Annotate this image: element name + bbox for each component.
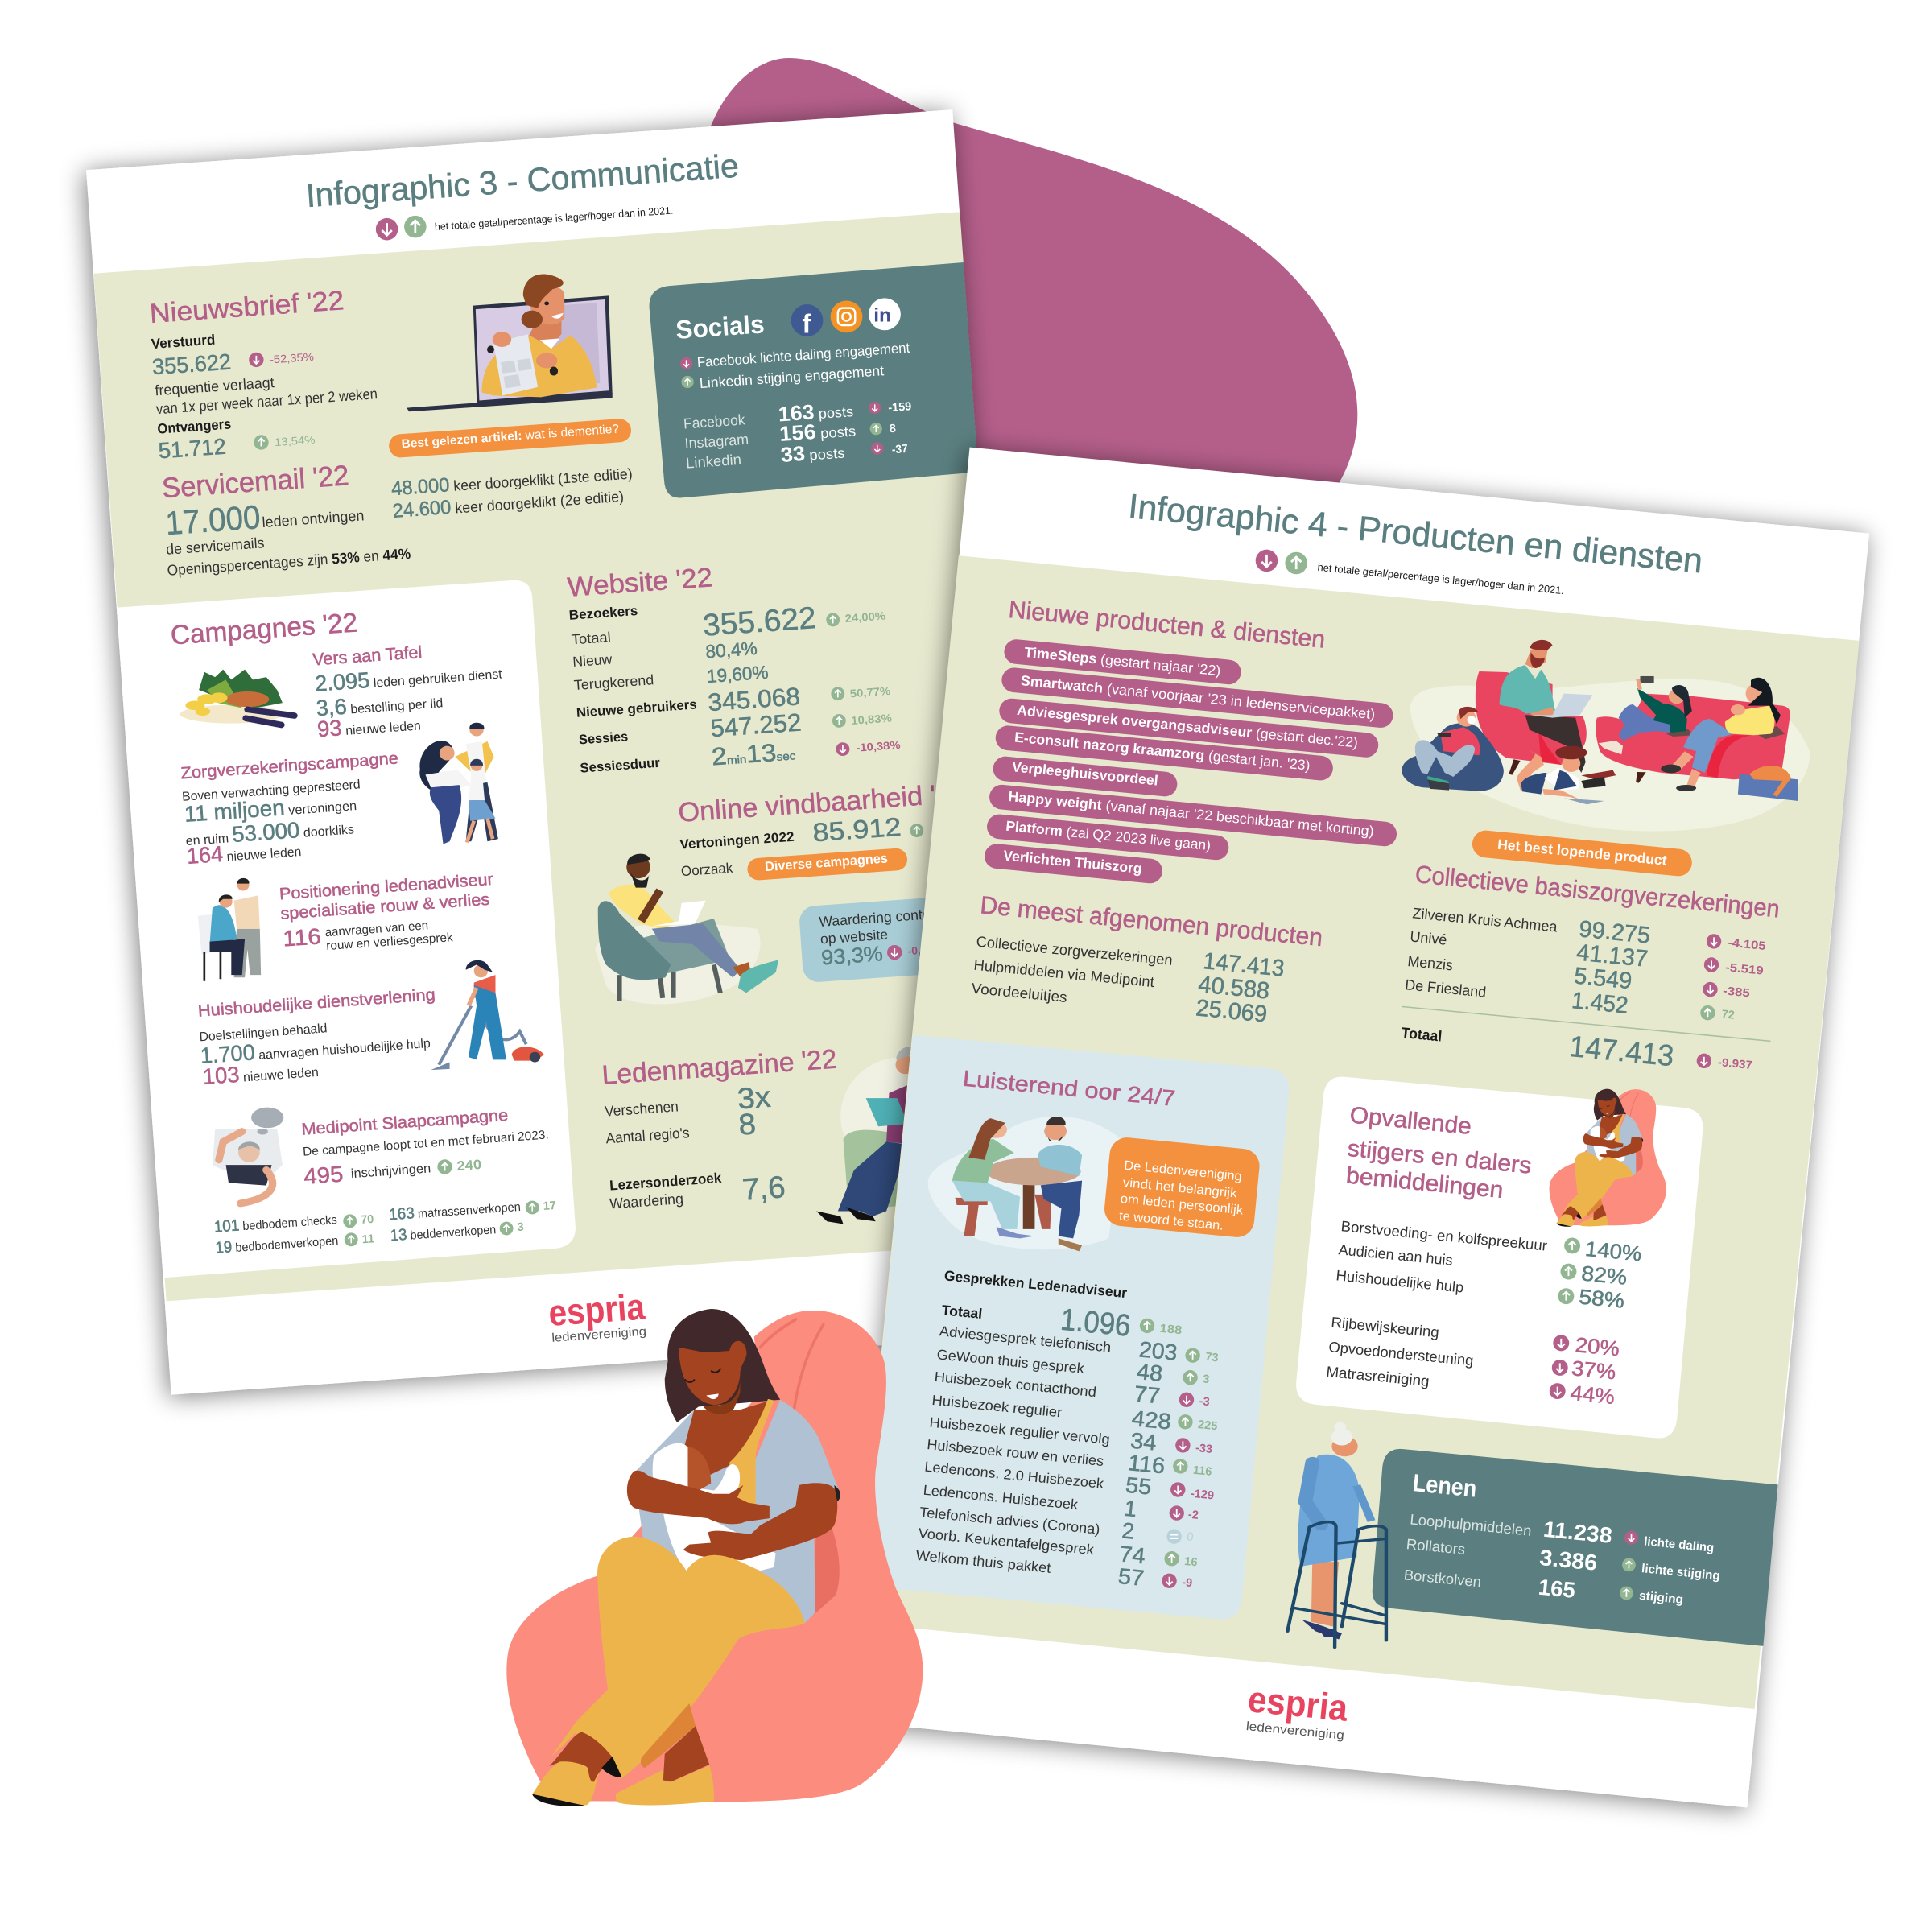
row huishoudelijke hulp: 58%	[1578, 1284, 1625, 1313]
text frequentie: frequentie verlaagt	[155, 374, 275, 398]
change -52,35%: -52,35%	[269, 351, 314, 366]
section: online vindbaarheid	[677, 778, 988, 983]
number verstuurd: 355.622	[151, 349, 232, 379]
row loophulpmiddelen	[1410, 1510, 1715, 1555]
row rollators: lichte stijging	[1641, 1562, 1721, 1583]
row huisbezoek regulier: 428	[1131, 1406, 1172, 1435]
row loophulpmiddelen: 11.238	[1542, 1517, 1613, 1548]
row waardering	[609, 1170, 786, 1212]
section: campagnes	[170, 608, 556, 1257]
row zilveren kruis	[1412, 904, 1766, 953]
row audicien: Audicien aan huis	[1338, 1241, 1454, 1269]
section: nieuwsbrief	[149, 286, 378, 463]
row rouw en verlies	[927, 1436, 1212, 1479]
pill happy weight: Happy weight (vanaf najaar '22 beschikbaar met korting)	[1008, 788, 1375, 840]
row adviesgesprek telefonisch: 73	[1205, 1351, 1219, 1364]
row rollators: 3.386	[1538, 1545, 1599, 1575]
callout: best gelezen artikel	[388, 418, 632, 458]
text boven verwachting: Boven verwachting gepresteerd	[182, 777, 361, 804]
panel: lenen	[1373, 1449, 1778, 1646]
heading online vindbaarheid: Online vindbaarheid '22	[677, 778, 967, 828]
heading luisterend: Luisterend oor 24/7	[962, 1066, 1176, 1111]
label verstuurd: Verstuurd	[151, 332, 216, 352]
stat 355.622: 24,00%	[844, 609, 886, 625]
stat 101: 101 bedbodem checks	[213, 1210, 338, 1236]
row gewoon thuis	[936, 1346, 1210, 1386]
pill verpleeghuisvoordeel	[992, 755, 1179, 798]
stat 355.622: 355.622	[702, 601, 817, 643]
row ledencons huisbezoek	[923, 1482, 1199, 1522]
stat 163: 17	[543, 1199, 556, 1213]
row totaal	[1401, 1024, 1752, 1072]
row hulpmiddelen: Hulpmiddelen via Medipoint	[973, 956, 1155, 990]
change 13,54%	[254, 434, 316, 450]
heading ledenmagazine: Ledenmagazine '22	[601, 1045, 838, 1091]
pill smartwatch: Smartwatch (vanaf voorjaar '23 in ledenservicepakket)	[1020, 672, 1376, 722]
illustration: elderly woman with walker	[1287, 1422, 1386, 1647]
row rouw en verlies: 116	[1192, 1464, 1212, 1479]
row huishoudelijke hulp	[1335, 1266, 1625, 1313]
stat 164: 164 nieuwe leden	[186, 836, 302, 869]
heading nieuwe producten: Nieuwe producten & diensten	[1007, 596, 1327, 654]
section: collectieve basiszorgverzekeringen	[1401, 861, 1781, 1072]
row zorgverzekeringen	[976, 933, 1286, 982]
clicks 48.000: 48.000 keer doorgeklikt (1ste editie)	[390, 461, 633, 500]
row waardering: Waardering	[609, 1190, 684, 1212]
row voordeeluitjes	[971, 980, 1268, 1028]
text de servicemails: de servicemails	[165, 534, 265, 558]
change 13,54%: 13,54%	[274, 434, 316, 448]
row telefonisch advies: 0	[1187, 1530, 1194, 1544]
pill timesteps: TimeSteps (gestart najaar '22)	[1024, 644, 1221, 679]
row totaal: -9.937	[1717, 1056, 1752, 1072]
row borstkolven: Borstkolven	[1403, 1566, 1482, 1590]
heading opvallende: bemiddelingen	[1345, 1163, 1505, 1203]
change -52,35%	[249, 351, 314, 367]
pill platform: Platform (zal Q2 2023 live gaan)	[1005, 818, 1212, 853]
section: ledenmagazine	[601, 1045, 838, 1212]
row welkom thuis: Welkom thuis pakket	[915, 1547, 1051, 1576]
row rijbewijskeuring: 20%	[1575, 1332, 1620, 1360]
row instagram	[684, 416, 896, 452]
row facebook: 163 posts	[778, 397, 854, 426]
row opvoedondersteuning	[1328, 1338, 1617, 1384]
row zilveren kruis: 99.275	[1578, 916, 1651, 949]
pill e-consult: E-consult nazorg kraamzorg (gestart jan. '23)	[1013, 729, 1311, 774]
row voordeeluitjes: Voordeeluitjes	[971, 980, 1068, 1005]
row regio's: 8	[737, 1107, 757, 1141]
callout: ledenvereniging quote: vindt het belangrijk	[1122, 1175, 1238, 1201]
row linkedin: 33 posts	[780, 438, 845, 467]
heading meest afgenomen: De meest afgenomen producten	[979, 891, 1323, 952]
row instagram: 156 posts	[778, 416, 857, 446]
page: infographic 4 producten en diensten	[848, 448, 1869, 1807]
labels website: Totaal	[571, 629, 611, 648]
box waardering content: op website	[819, 927, 889, 947]
row zorgverzekeringen: 147.413	[1202, 948, 1286, 982]
icon: linkedin: in	[873, 304, 891, 326]
pill diverse campagnes	[747, 848, 908, 881]
pill timesteps	[1003, 638, 1242, 686]
illustration: mother breastfeeding on beanbag	[506, 1309, 923, 1806]
pill platform	[986, 813, 1230, 861]
row waardering: 7,6	[741, 1170, 786, 1208]
heading zorgverzekeringscampagne: Zorgverzekeringscampagne	[180, 749, 399, 782]
note facebook engagement: Facebook lichte daling engagement	[696, 340, 910, 370]
stat 547.252: 10,83%	[851, 712, 892, 727]
row verschenen: Verschenen	[604, 1097, 679, 1120]
row huisbezoek regulier	[931, 1392, 1218, 1435]
clicks 24.600: 24.600 keer doorgeklikt (2e editie)	[392, 485, 625, 522]
heading opvallende	[1345, 1103, 1533, 1203]
row keukentafelgesprek: 74	[1118, 1541, 1146, 1568]
purple background blob	[711, 58, 1357, 518]
logo: espria page 3: espria	[547, 1286, 646, 1334]
row totaal: 1.096	[1059, 1302, 1132, 1344]
row opvoedondersteuning: 37%	[1571, 1356, 1617, 1384]
row borstkolven: stijging	[1638, 1589, 1684, 1607]
box waardering content: 93,3%	[820, 941, 884, 969]
row hulpmiddelen	[973, 956, 1271, 1005]
row huisbezoek regulier: Huisbezoek regulier	[931, 1392, 1063, 1420]
row borstkolven	[1403, 1566, 1684, 1607]
pill diverse campagnes: Diverse campagnes	[764, 851, 888, 874]
row adviesgesprek telefonisch: Adviesgesprek telefonisch	[939, 1323, 1112, 1356]
panel: socials	[650, 262, 978, 497]
row totaal: Totaal	[941, 1302, 983, 1322]
row welkom thuis: -9	[1181, 1576, 1193, 1590]
labels website: Nieuw	[572, 651, 613, 670]
row ledencons huisbezoek: 1	[1123, 1496, 1138, 1521]
box waardering content: -0,	[907, 944, 921, 957]
labels website: Bezoekers	[568, 603, 638, 623]
row facebook: -159	[888, 400, 912, 415]
stat 345.068: 345.068	[707, 683, 801, 716]
row zilveren kruis: Zilveren Kruis Achmea	[1412, 904, 1558, 935]
row matrasreiniging: Matrasreiniging	[1326, 1363, 1430, 1389]
logo: espria page 3: ledenvereniging	[551, 1325, 647, 1345]
panel: luisterend oor	[860, 1035, 1289, 1620]
note linkedin engagement: Linkedin stijging engagement	[699, 362, 885, 391]
row rollators	[1406, 1535, 1721, 1583]
heading lenen: Lenen	[1411, 1469, 1478, 1503]
labels website: Sessiesduur	[580, 755, 661, 776]
row loophulpmiddelen: lichte daling	[1643, 1534, 1715, 1555]
heading medipoint: Medipoint Slaapcampagne	[301, 1106, 509, 1139]
heading collectieve: Collectieve basiszorgverzekeringen	[1414, 861, 1781, 923]
stat 116: 116	[282, 923, 322, 951]
text doelstellingen: Doelstellingen behaald	[199, 1021, 328, 1044]
stat session duration: 2min13sec	[711, 737, 796, 770]
illustration: woman vacuuming	[431, 960, 544, 1070]
labels website: Nieuwe gebruikers	[576, 696, 697, 720]
row huishoudelijke hulp: Huishoudelijke hulp	[1335, 1266, 1464, 1296]
stat 495: 495	[303, 1162, 344, 1189]
illustration: woman in laptop	[407, 275, 613, 411]
pill adviesgesprek: Adviesgesprek overgangsadviseur (gestart dec.'22)	[1016, 702, 1359, 751]
row audicien: 82%	[1580, 1261, 1628, 1290]
row rijbewijskeuring	[1331, 1314, 1620, 1360]
section: meest afgenomen producten	[971, 891, 1323, 1028]
illustration: adviser and member	[198, 878, 261, 981]
row gewoon thuis: 3	[1202, 1373, 1210, 1386]
heading gesprekken: Gesprekken Ledenadviseur	[943, 1267, 1128, 1301]
stat 3,6: 3,6 bestelling per lid	[316, 687, 444, 720]
row voordeeluitjes: 25.069	[1195, 995, 1268, 1028]
row de friesland: 1.452	[1571, 988, 1629, 1019]
stat 547.252	[709, 708, 892, 742]
row menzis: -385	[1722, 985, 1750, 1000]
row instagram: Instagram	[684, 431, 749, 452]
row telefonisch advies: Telefonisch advies (Corona)	[919, 1504, 1100, 1538]
labels website	[568, 603, 697, 776]
row rijbewijskeuring: Rijbewijskeuring	[1331, 1314, 1440, 1340]
row keukentafelgesprek	[918, 1525, 1198, 1569]
row regulier vervolg: 34	[1129, 1428, 1158, 1455]
row regulier vervolg	[929, 1414, 1213, 1456]
row totaal: 147.413	[1568, 1030, 1675, 1072]
row huisbezoek contacthond: -3	[1199, 1395, 1210, 1409]
stat 93: 93 nieuwe leden	[316, 709, 422, 741]
callout: ledenvereniging quote: te woord te staan.	[1118, 1208, 1224, 1233]
row ledencons 2.0: Ledencons. 2.0 Huisbezoek	[924, 1459, 1104, 1492]
illustration: woman reading	[816, 1046, 964, 1224]
number ontvangers: 51.712	[158, 434, 227, 463]
row telefonisch advies: 2	[1121, 1517, 1136, 1544]
stat 116: aanvragen van een	[324, 919, 429, 939]
row regulier vervolg: Huisbezoek regulier vervolg	[929, 1414, 1111, 1447]
row hulpmiddelen: 40.588	[1197, 972, 1271, 1005]
row totaal: 188	[1159, 1323, 1183, 1337]
legend text: het totale getal/percentage is lager/hoger dan in 2021.	[1317, 561, 1565, 597]
illustration: conversation at table	[928, 1117, 1123, 1251]
heading positionering ledenadviseur	[279, 870, 494, 923]
text frequentie: van 1x per week naar 1x per 2 weken	[155, 385, 378, 417]
heading: infographic 4: Infographic 4 - Producten en diensten	[1127, 487, 1704, 580]
stat 495: 240	[456, 1157, 482, 1174]
logo: espria page 4: espria	[1246, 1678, 1350, 1729]
row de friesland: De Friesland	[1405, 976, 1487, 1001]
row huisbezoek contacthond: 77	[1133, 1381, 1162, 1408]
stat 163: 163 matrassenverkopen	[388, 1197, 521, 1224]
pill e-consult	[994, 724, 1334, 782]
stat 13: 3	[517, 1221, 524, 1234]
illustration: salad	[180, 670, 295, 724]
label vertoningen: Vertoningen 2022	[679, 829, 795, 852]
stat 116: rouw en verliesgesprek	[326, 931, 454, 953]
row de friesland: 72	[1721, 1008, 1736, 1022]
row verschenen	[604, 1080, 772, 1120]
box waardering content: Waardering content	[819, 905, 943, 930]
callout: ledenvereniging quote	[1103, 1136, 1261, 1239]
label ontvangers: Ontvangers	[157, 415, 232, 437]
heading socials: Socials	[675, 309, 766, 345]
row keukentafelgesprek: Voorb. Keukentafelgesprek	[918, 1525, 1095, 1558]
stat session duration: -10,38%	[856, 739, 901, 754]
row borstkolven: 165	[1538, 1575, 1576, 1603]
callout: het best lopende product	[1471, 829, 1693, 877]
text openingspercentages: Openingspercentages zijn 53% en 44%	[167, 545, 411, 579]
row totaal	[941, 1302, 1183, 1344]
stat 495	[303, 1157, 482, 1189]
row opvoedondersteuning: Opvoedondersteuning	[1328, 1338, 1474, 1368]
row huisbezoek regulier: 225	[1197, 1418, 1218, 1433]
heading campagnes: Campagnes '22	[170, 608, 358, 650]
row verschenen: 3x	[737, 1080, 772, 1116]
icon: instagram	[831, 300, 862, 332]
row ledencons huisbezoek: -2	[1187, 1509, 1199, 1522]
illustration: family	[419, 723, 498, 844]
heading huishoudelijke dienstverlening: Huishoudelijke dienstverlening	[197, 985, 436, 1021]
stat 19: 11	[361, 1232, 375, 1246]
label oorzaak: Oorzaak	[680, 860, 733, 879]
legend text: het totale getal/percentage is lager/hoger dan in 2021.	[434, 204, 674, 233]
page: infographic 3 communicatie	[86, 109, 1038, 1395]
number 85.912: 85.912	[811, 812, 902, 847]
illustration: sleeping man	[213, 1108, 283, 1203]
stat 53.000: en ruim 53.000 doorkliks	[184, 813, 355, 850]
stat 345.068: 50,77%	[849, 685, 891, 700]
stat 19: 19 bedbodemverkopen	[215, 1231, 339, 1257]
stat 547.252: 547.252	[709, 708, 803, 742]
illustration: family on sofas	[1402, 640, 1810, 832]
row huisbezoek contacthond	[934, 1368, 1210, 1409]
row keukentafelgesprek: 16	[1184, 1555, 1198, 1569]
heading website: Website '22	[567, 563, 713, 603]
heading: infographic 3: Infographic 3 - Communicatie	[305, 147, 740, 214]
legend icons	[376, 216, 427, 240]
row huisbezoek contacthond: Huisbezoek contacthond	[934, 1368, 1097, 1400]
row instagram: 8	[889, 423, 896, 436]
stat 495: inschrijvingen	[350, 1161, 431, 1181]
stat 19,60%: 19,60%	[706, 662, 769, 687]
icon: facebook	[791, 304, 823, 339]
stat 1.700: 1.700 aanvragen huishoudelijke hulp	[200, 1027, 431, 1068]
stat 80,4%: 80,4%	[705, 638, 758, 662]
row ledencons huisbezoek: Ledencons. Huisbezoek	[923, 1482, 1079, 1513]
row welkom thuis: 57	[1117, 1563, 1146, 1591]
row unive: -5.519	[1724, 961, 1764, 978]
legend icons	[1256, 550, 1307, 574]
labels website: Sessies	[578, 729, 629, 747]
stat 11 miljoen: 11 miljoen vertoningen	[184, 790, 357, 827]
row adviesgesprek telefonisch	[939, 1323, 1219, 1365]
row matrasreiniging: 44%	[1569, 1381, 1616, 1409]
row totaal: Totaal	[1401, 1024, 1443, 1045]
pill verlichten thuiszorg: Verlichten Thuiszorg	[1003, 847, 1143, 877]
white panel campagnes	[117, 580, 576, 1278]
row borstvoeding: 140%	[1584, 1236, 1643, 1265]
row menzis: Menzis	[1407, 952, 1454, 973]
row menzis	[1407, 952, 1750, 1000]
stat session duration	[711, 737, 901, 770]
text leden ontvingen: leden ontvingen	[262, 506, 365, 530]
row borstvoeding	[1340, 1217, 1643, 1265]
row rouw en verlies: 116	[1127, 1450, 1166, 1478]
row linkedin: -37	[891, 443, 908, 456]
row regio's	[605, 1107, 757, 1146]
heading servicemail: Servicemail '22	[161, 460, 350, 504]
row audicien	[1338, 1241, 1628, 1290]
heading positionering ledenadviseur: Positionering ledenadviseur	[279, 870, 494, 903]
heading positionering ledenadviseur: specialisatie rouw & verlies	[280, 890, 490, 923]
callout: best gelezen artikel: Best gelezen artikel: wat is dementie?	[401, 423, 620, 451]
row unive: Univé	[1410, 927, 1447, 948]
section: website	[567, 563, 901, 776]
row gewoon thuis: 48	[1136, 1359, 1164, 1386]
labels website: Terugkerend	[573, 671, 654, 693]
row linkedin: Linkedin	[685, 451, 742, 472]
section: nieuwe producten	[984, 596, 1397, 885]
row borstvoeding: Borstvoeding- en kolfspreekuur	[1340, 1217, 1548, 1254]
row loophulpmiddelen: Loophulpmiddelen	[1410, 1510, 1532, 1539]
logo: espria page 4: ledenvereniging	[1245, 1719, 1345, 1743]
panel: opvallende stijgers en dalers	[1296, 1077, 1703, 1439]
heading opvallende: stijgers en dalers	[1346, 1136, 1533, 1179]
row de friesland	[1405, 976, 1736, 1022]
row rollators: Rollators	[1406, 1535, 1466, 1558]
row rouw en verlies: Huisbezoek rouw en verlies	[927, 1436, 1104, 1469]
heading opvallende: Opvallende	[1348, 1103, 1472, 1140]
illustration: small mother	[1550, 1089, 1666, 1227]
illustration: man in armchair	[595, 854, 778, 1004]
heading vers aan tafel: Vers aan Tafel	[312, 642, 423, 670]
stat 345.068	[707, 683, 891, 716]
stat 2.095: 2.095 leden gebruiken dienst	[314, 658, 503, 696]
row ledencons 2.0: -129	[1190, 1488, 1215, 1502]
icon: linkedin	[869, 298, 901, 330]
pill verpleeghuisvoordeel: Verpleeghuisvoordeel	[1011, 758, 1158, 789]
stat 101: 70	[361, 1213, 374, 1227]
icon: facebook: f	[802, 309, 811, 339]
stat 13: 13 beddenverkopen	[390, 1220, 497, 1245]
row regulier vervolg: -33	[1195, 1442, 1213, 1456]
row telefonisch advies	[919, 1504, 1194, 1544]
row regio's: Aantal regio's	[605, 1124, 690, 1146]
row zorgverzekeringen: Collectieve zorgverzekeringen	[976, 933, 1174, 968]
row adviesgesprek telefonisch: 203	[1138, 1336, 1179, 1365]
row menzis: 5.549	[1573, 964, 1633, 994]
row unive: 41.137	[1575, 939, 1649, 972]
row zilveren kruis: -4.105	[1728, 937, 1766, 953]
stat 355.622	[702, 601, 886, 643]
row facebook	[683, 397, 912, 432]
heading nieuwsbrief: Nieuwsbrief '22	[149, 286, 345, 329]
number 17.000: 17.000	[164, 498, 262, 542]
row ledencons 2.0: 55	[1125, 1472, 1153, 1500]
callout: het best lopende product: Het best lopende product	[1496, 836, 1668, 869]
stat 116	[282, 919, 454, 953]
row ledencons 2.0	[924, 1459, 1215, 1502]
section: servicemail	[161, 460, 633, 579]
callout: ledenvereniging quote: De Ledenvereniging	[1124, 1158, 1243, 1184]
box waardering content	[799, 894, 988, 983]
row unive	[1410, 927, 1764, 978]
pill verlichten thuiszorg	[984, 843, 1163, 885]
row matrasreiniging	[1326, 1363, 1616, 1409]
label lezersonderzoek: Lezersonderzoek	[609, 1170, 722, 1194]
stat 103: 103 nieuwe leden	[202, 1056, 319, 1089]
callout: ledenvereniging quote: om leden persoonlijk	[1120, 1191, 1245, 1218]
row facebook: Facebook	[683, 411, 746, 432]
row linkedin	[685, 438, 908, 472]
text de campagne: De campagne loopt tot en met februari 2023.	[303, 1128, 549, 1159]
row welkom thuis	[915, 1547, 1193, 1591]
row gewoon thuis: GeWoon thuis gesprek	[936, 1346, 1085, 1377]
